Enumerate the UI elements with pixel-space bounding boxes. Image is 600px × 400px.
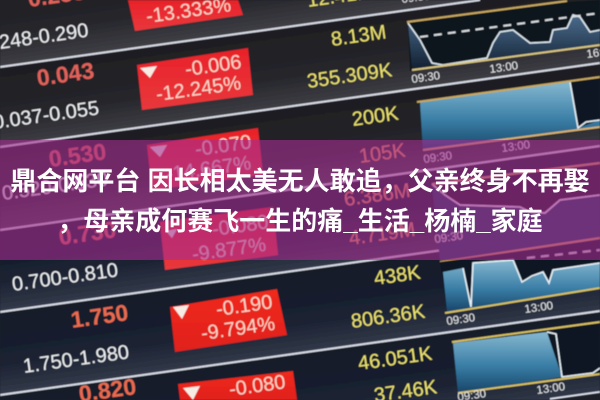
chart time labels: 09:30: [446, 312, 476, 328]
ticker numbers: 0.700-0.810: [11, 259, 119, 296]
volume numbers: 4.719M: [348, 219, 417, 250]
ticker numbers: 0.730: [57, 216, 118, 250]
volume numbers: 438K: [373, 262, 423, 290]
ticker numbers: 248-0.290: [0, 20, 90, 54]
chart time labels: 13:00: [524, 300, 554, 316]
ticker numbers: 1.750: [69, 299, 130, 333]
chart 4: [440, 240, 600, 313]
title: [10, 166, 590, 236]
ticker numbers: -9.877%: [191, 234, 268, 266]
red change boxes: [128, 0, 297, 400]
volume numbers: 8.13M: [330, 21, 388, 51]
ticker numbers: -0.080: [211, 211, 270, 241]
chart 5: [452, 322, 600, 393]
ticker numbers: -0.190: [215, 291, 274, 321]
chart time labels: 13:00: [501, 139, 531, 155]
volume numbers: [306, 0, 439, 400]
ticker numbers: -0.006: [184, 51, 243, 81]
ticker numbers: -12.245%: [155, 72, 243, 106]
chart time labels: [401, 0, 600, 400]
chart 3: [432, 163, 600, 262]
ticker numbers: 0.043: [35, 57, 96, 91]
volume numbers: 46.051K: [357, 343, 434, 375]
ticker numbers: -14.667%: [165, 152, 253, 186]
volume numbers: 806.36K: [350, 301, 427, 333]
chart time labels: 09:30: [434, 230, 464, 246]
volume numbers: 200K: [351, 103, 401, 131]
ticker numbers: -9.794%: [200, 313, 277, 345]
chart time labels: 09:30: [411, 70, 441, 86]
chart 2: [417, 77, 600, 151]
down triangles: [140, 66, 200, 400]
volume numbers: 105K: [358, 140, 408, 168]
volume numbers: 355.309K: [306, 59, 394, 93]
ticker numbers: 0.530: [47, 138, 108, 172]
ticker numbers: 1.750-1.980: [22, 341, 130, 378]
ticker numbers: [0, 0, 287, 400]
ticker numbers: -0.070: [194, 131, 253, 161]
volume numbers: 6.386M: [343, 180, 412, 211]
title: 鼎合网平台 因长相太美无人敢追，父亲终身不再娶: [10, 166, 590, 196]
title: ，母亲成何赛飞一生的痛_生活_杨楠_家庭: [57, 206, 543, 236]
chart time labels: 13:00: [489, 60, 519, 76]
chart time labels: 09:30: [423, 150, 453, 166]
ticker numbers: 0.520-0.530: [1, 168, 109, 205]
chart 1: [407, 0, 600, 71]
chart time labels: 13:00: [536, 381, 566, 397]
purple title band: [0, 140, 600, 260]
